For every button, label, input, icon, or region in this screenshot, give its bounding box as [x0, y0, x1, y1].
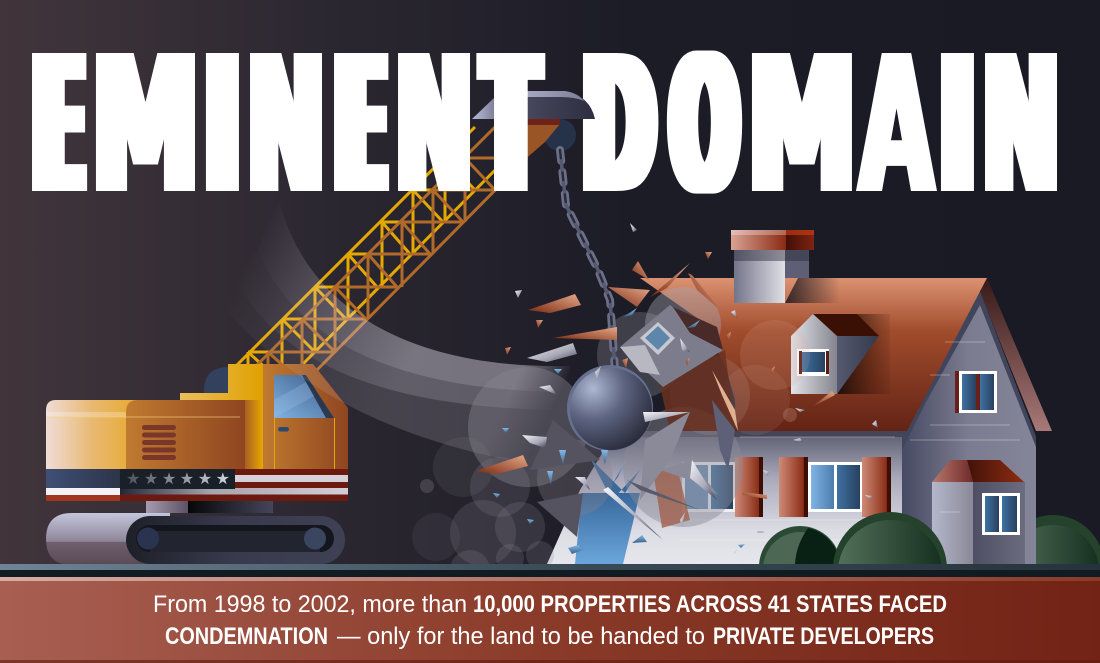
title word: DOMAIN: M — [748, 17, 856, 236]
rear yellow body — [46, 400, 140, 469]
caption text: From 1998 to 2002, more than — [153, 591, 467, 618]
ground strip — [0, 564, 1100, 577]
chimney shadow on roof — [785, 278, 840, 303]
lower wall — [547, 431, 902, 564]
yellow pillar — [245, 400, 263, 469]
grey debris — [530, 370, 738, 537]
title word: DOMAIN — [583, 15, 1059, 237]
wrecking ball — [567, 365, 653, 451]
title word: EMINENT: N — [396, 17, 472, 237]
porch tower — [932, 460, 1025, 564]
cab — [263, 364, 348, 469]
shards: brown — [476, 252, 835, 499]
chain — [560, 150, 615, 370]
house — [547, 230, 1100, 564]
cab window — [274, 375, 334, 418]
cab dome — [204, 367, 228, 393]
undercarriage — [146, 501, 273, 513]
bushes — [759, 512, 947, 564]
dormer — [791, 314, 890, 394]
main roof — [640, 278, 987, 431]
body highlight line — [46, 416, 240, 418]
caption text: PRIVATE DEVELOPERS — [713, 623, 934, 650]
cab door — [274, 418, 334, 469]
crane — [46, 91, 595, 565]
siding highlights — [655, 342, 1020, 540]
title word: DOMAIN: A — [860, 17, 933, 236]
flag stripes — [46, 469, 348, 501]
orange body — [126, 400, 245, 469]
caption band — [0, 577, 1100, 663]
title word: DOMAIN: D — [583, 15, 655, 236]
title word: EMINENT: M — [92, 16, 199, 237]
ground floor shutters — [735, 457, 891, 517]
far right bush — [1036, 515, 1100, 564]
caption text: CONDEMNATION — [165, 623, 328, 650]
caption text: — only for the land to be handed to — [337, 623, 705, 650]
chimney — [731, 230, 814, 303]
sheen — [46, 412, 126, 417]
title word: EMINENT: T — [486, 15, 536, 236]
title word: DOMAIN: I — [945, 16, 970, 236]
caption text — [153, 591, 947, 650]
caption text: 10,000 PROPERTIES ACROSS 41 STATES FACED — [473, 591, 947, 618]
rear track drum — [46, 513, 170, 565]
title word: EMINENT: E — [36, 15, 82, 236]
wall dark band — [640, 431, 902, 437]
title word: DOMAIN: O — [671, 16, 738, 237]
right wing gable — [902, 278, 1052, 564]
blue door — [575, 493, 640, 564]
title word: DOMAIN: N — [983, 17, 1059, 237]
boom lattice — [237, 127, 527, 372]
title word: EMINENT: I — [210, 16, 235, 236]
broken wall chunk — [620, 305, 735, 528]
title word: EMINENT — [36, 15, 536, 237]
boom head — [472, 91, 595, 190]
shards: white — [515, 223, 878, 555]
ground floor window left — [682, 462, 735, 512]
motion trails — [206, 190, 570, 470]
title word: EMINENT: N — [248, 17, 324, 237]
dust clouds — [412, 287, 810, 590]
gable window — [955, 371, 997, 413]
track — [126, 516, 345, 564]
vents — [142, 425, 176, 460]
ground floor window right — [808, 462, 862, 512]
shards: blue — [493, 308, 745, 554]
door fragments — [592, 461, 640, 493]
star panel: ★★★★★★ — [126, 469, 230, 488]
title word: EMINENT: E — [338, 15, 384, 236]
upper housing — [180, 364, 263, 400]
